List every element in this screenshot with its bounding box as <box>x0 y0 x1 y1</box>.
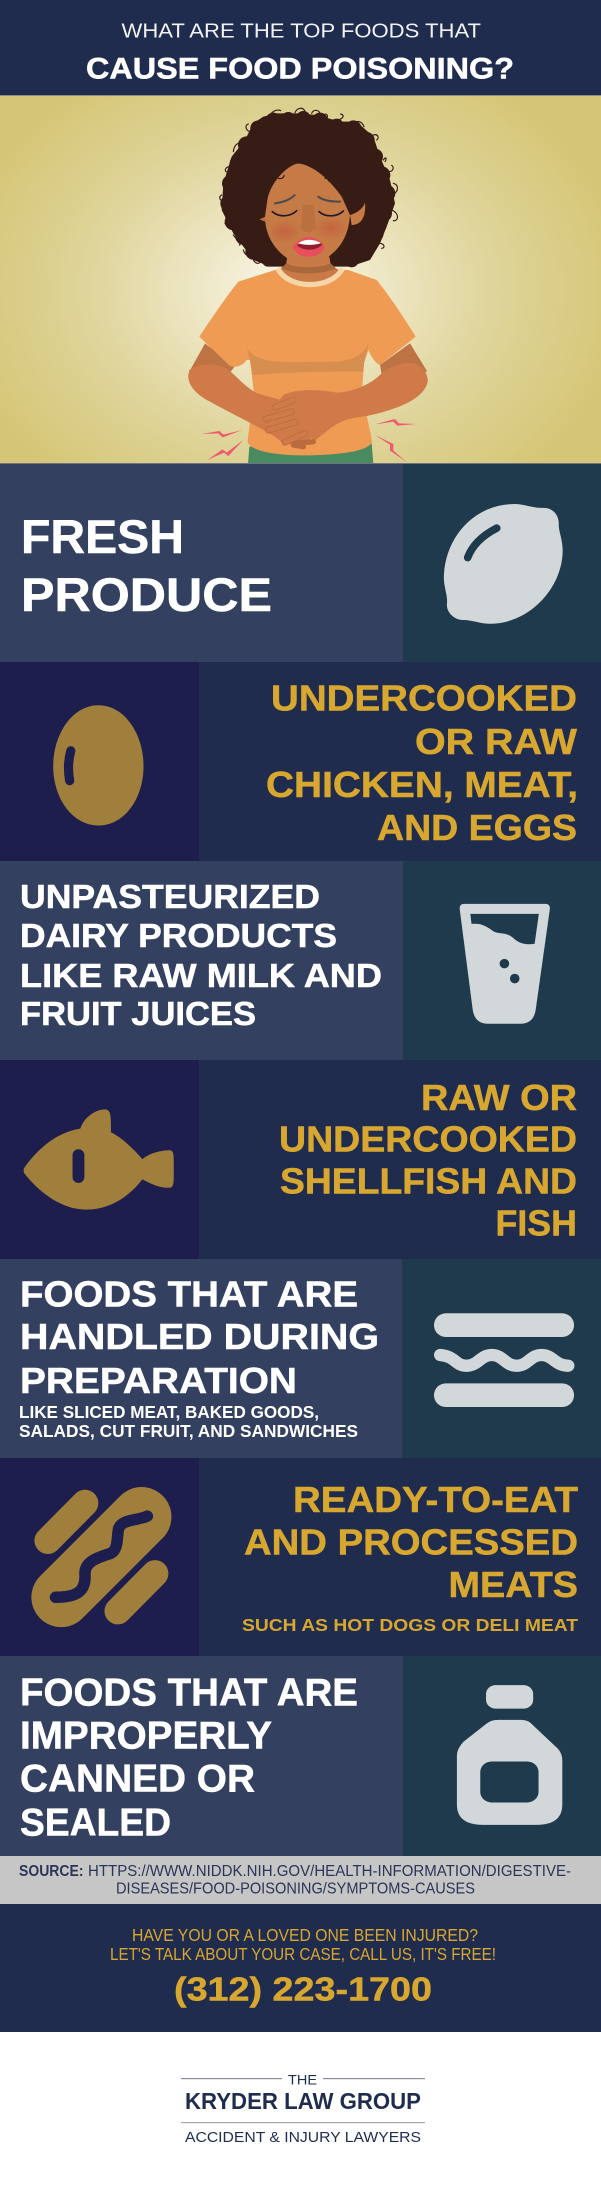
upper arms <box>189 343 427 374</box>
heading: fresh produce: FRESH <box>21 510 184 563</box>
source citation: SOURCE: <box>19 1863 84 1880</box>
call to action panel <box>0 1904 601 2032</box>
neck <box>280 256 339 282</box>
heading: improperly canned or sealed: CANNED OR <box>20 1758 255 1801</box>
icon: glass <box>460 904 550 1024</box>
phone number: (312) 223-1700 <box>174 1971 432 2008</box>
source citation <box>19 1863 571 1898</box>
subtext: examples of handled foods: SALADS, CUT FRUIT, AND SANDWICHES <box>19 1421 358 1441</box>
heading: fresh produce: PRODUCE <box>21 568 272 621</box>
ears <box>350 203 365 225</box>
heading: undercooked or raw chicken, meat, and eggs: OR RAW <box>415 721 578 762</box>
eyebrows <box>275 195 295 203</box>
icon: lemon <box>444 504 563 624</box>
subtext: such as hot dogs or deli meat: SUCH AS HOT DOGS OR DELI MEAT <box>242 1615 578 1635</box>
heading: fresh produce <box>21 510 272 621</box>
icon: egg <box>53 705 144 825</box>
heading: foods handled during preparation: PREPARATION <box>20 1360 297 1401</box>
subtext: examples of handled foods: LIKE SLICED MEAT, BAKED GOODS, <box>19 1402 319 1422</box>
face <box>265 163 350 264</box>
title line 2: CAUSE FOOD POISONING? <box>86 52 514 85</box>
subtext: examples of handled foods <box>19 1402 358 1441</box>
call to action text <box>110 1925 496 1964</box>
hair fringe <box>278 163 329 182</box>
section: unpasteurized dairy <box>0 861 601 1060</box>
pain marks <box>202 419 416 462</box>
illustration: head and hair <box>220 108 397 285</box>
icon: hot dog <box>48 1503 155 1611</box>
illustration: body and arms <box>188 270 428 464</box>
heading: ready-to-eat and processed meats <box>244 1479 578 1605</box>
nose <box>301 205 316 232</box>
fingers <box>266 400 313 447</box>
icon: jar <box>457 1685 562 1825</box>
heading: improperly canned or sealed <box>20 1672 358 1844</box>
section: improperly canned or sealed <box>0 1656 601 1856</box>
heading: foods handled during preparation: HANDLED DURING <box>20 1316 379 1357</box>
logo: Kryder Law Group: THE <box>288 2072 317 2088</box>
pants <box>248 443 373 464</box>
closed eyes <box>272 211 297 216</box>
heading: improperly canned or sealed: FOODS THAT ARE <box>20 1672 358 1714</box>
heading: ready-to-eat and processed meats: READY-TO-EAT <box>293 1479 578 1520</box>
icon: sandwich <box>434 1313 574 1407</box>
logo: Kryder Law Group: ACCIDENT & INJURY LAWYERS <box>185 2130 421 2146</box>
left forearm <box>188 364 287 442</box>
hair curls <box>220 108 397 263</box>
shirt shading <box>245 340 369 375</box>
heading: foods handled during preparation: FOODS THAT ARE <box>20 1273 358 1314</box>
title line 1: WHAT ARE THE TOP FOODS THAT <box>122 21 481 43</box>
call to action text: LET'S TALK ABOUT YOUR CASE, CALL US, IT'S FREE! <box>110 1944 496 1964</box>
hero illustration panel <box>0 95 601 464</box>
call to action text: HAVE YOU OR A LOVED ONE BEEN INJURED? <box>132 1925 478 1945</box>
hand <box>280 390 336 444</box>
heading: raw or undercooked shellfish and fish <box>279 1077 577 1244</box>
shirt <box>199 270 416 455</box>
section: foods handled during preparation <box>0 1259 601 1458</box>
section: chicken, meat and eggs <box>0 662 601 861</box>
heading: unpasteurized dairy products <box>20 879 382 1033</box>
source citation: DISEASES/FOOD-POISONING/SYMPTOMS-CAUSES <box>116 1880 475 1898</box>
icon: fish <box>24 1109 174 1210</box>
logo: Kryder Law Group <box>181 2072 425 2146</box>
heading: unpasteurized dairy products: LIKE RAW MILK AND <box>20 958 382 995</box>
logo: Kryder Law Group: KRYDER LAW GROUP <box>185 2088 421 2114</box>
source citation: HTTPS://WWW.NIDDK.NIH.GOV/HEALTH-INFORMATION/DIGESTIVE- <box>88 1863 571 1880</box>
mouth <box>293 237 325 257</box>
heading: undercooked or raw chicken, meat, and eggs: UNDERCOOKED <box>271 678 577 719</box>
heading: undercooked or raw chicken, meat, and eggs <box>266 678 578 848</box>
source bar <box>0 1856 601 1904</box>
hair <box>220 111 395 267</box>
heading: unpasteurized dairy products: DAIRY PRODUCTS <box>20 918 337 955</box>
heading: raw or undercooked shellfish and fish: FISH <box>496 1203 577 1244</box>
heading: raw or undercooked shellfish and fish: UNDERCOOKED <box>279 1118 577 1159</box>
heading: raw or undercooked shellfish and fish: RAW OR <box>421 1077 577 1118</box>
heading: undercooked or raw chicken, meat, and eggs: CHICKEN, MEAT, <box>266 764 578 805</box>
heading: unpasteurized dairy products: UNPASTEURIZED <box>20 879 320 916</box>
header: title <box>0 0 601 95</box>
heading: ready-to-eat and processed meats: MEATS <box>448 1564 578 1605</box>
right side hair over face <box>349 213 354 215</box>
heading: raw or undercooked shellfish and fish: SHELLFISH AND <box>280 1160 577 1202</box>
cheeks <box>273 224 295 238</box>
heading: improperly canned or sealed: SEALED <box>20 1801 171 1844</box>
heading: foods handled during preparation <box>20 1273 379 1401</box>
heading: ready-to-eat and processed meats: AND PROCESSED <box>244 1521 578 1562</box>
right forearm <box>312 363 428 440</box>
shirt collar <box>278 268 343 285</box>
heading: unpasteurized dairy products: FRUIT JUICES <box>20 996 256 1033</box>
section: shellfish and fish <box>0 1060 601 1259</box>
section: fresh produce <box>0 464 601 662</box>
heading: undercooked or raw chicken, meat, and eggs: AND EGGS <box>377 807 577 848</box>
heading: improperly canned or sealed: IMPROPERLY <box>20 1714 272 1758</box>
section: ready-to-eat and processed meats <box>0 1458 601 1656</box>
